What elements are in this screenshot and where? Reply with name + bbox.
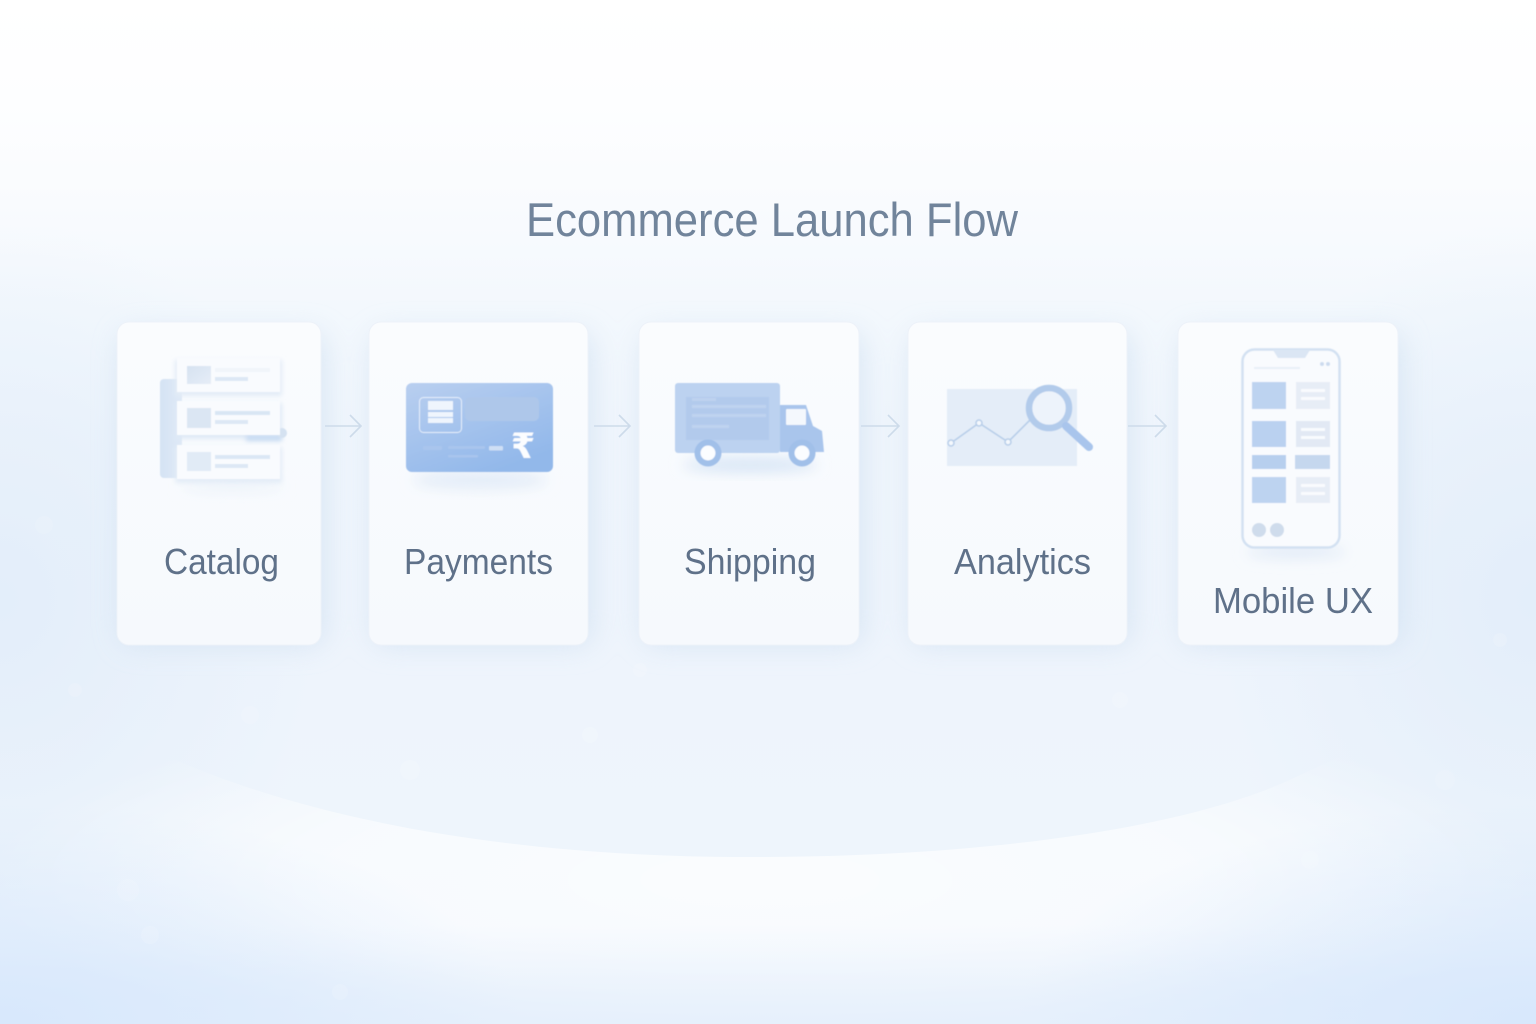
icon: line chart with magnifier xyxy=(947,388,1089,466)
icon: catalog list xyxy=(160,358,287,492)
icon: payment card: ₹ xyxy=(511,427,535,466)
arrow: payments to shipping xyxy=(594,415,630,437)
icon: delivery truck xyxy=(675,383,824,472)
card shadows xyxy=(121,332,1402,645)
panel: payments xyxy=(369,322,588,645)
label: analytics: Analytics xyxy=(954,541,1091,582)
icon: payment card xyxy=(406,383,553,489)
panel: shipping xyxy=(639,322,859,645)
arrow: analytics to mobile ux xyxy=(1128,415,1166,437)
panel: mobile ux xyxy=(1178,322,1398,645)
label: catalog: Catalog xyxy=(164,541,279,582)
label: shipping: Shipping xyxy=(684,541,816,582)
label: mobile ux: Mobile UX xyxy=(1213,580,1373,621)
title: Ecommerce Launch Flow xyxy=(526,193,1019,246)
label: payments: Payments xyxy=(404,541,553,582)
arrow: shipping to analytics xyxy=(861,415,899,437)
arrow: catalog to payments xyxy=(325,415,361,437)
panel: analytics xyxy=(908,322,1127,645)
panel: catalog xyxy=(117,322,321,645)
icon: smartphone xyxy=(1242,350,1346,558)
